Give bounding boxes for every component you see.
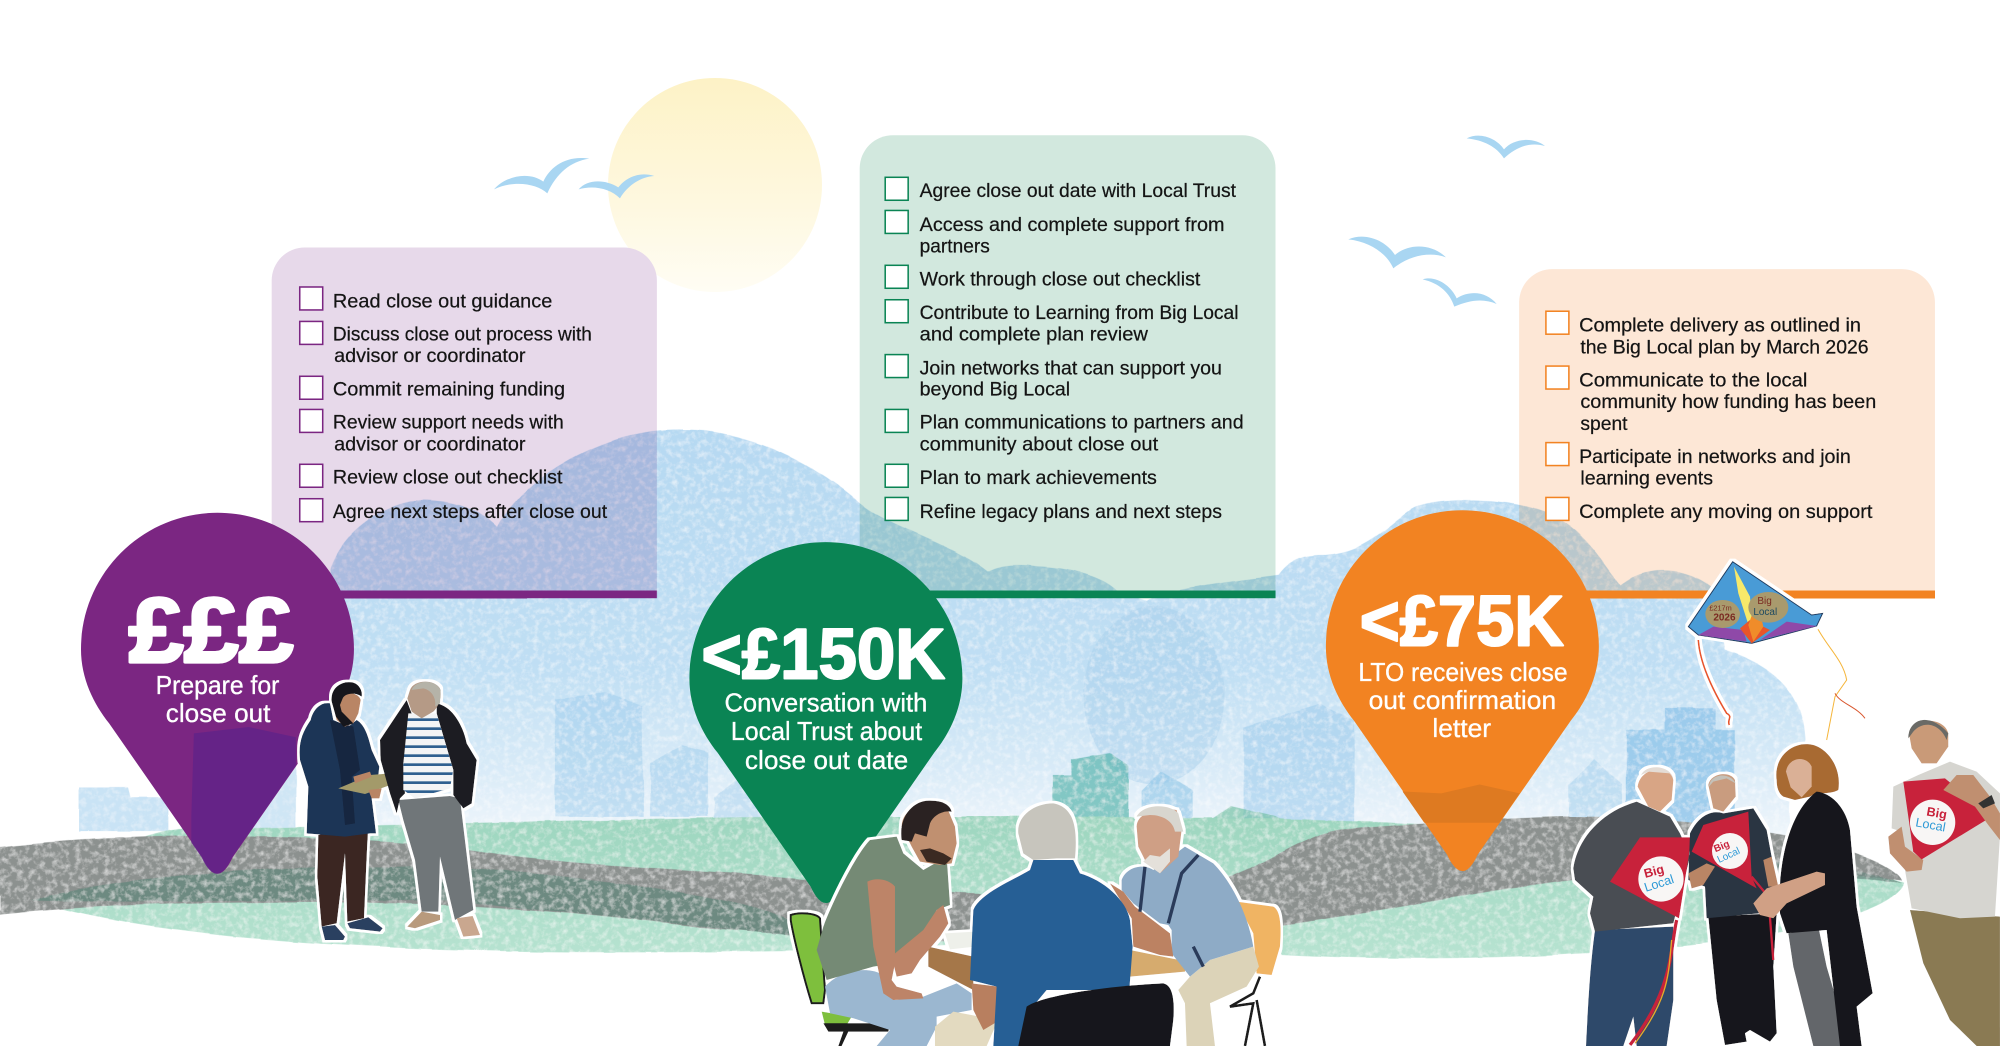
man in blue polo from behind — [935, 803, 1174, 1046]
green hill — [32, 816, 1904, 958]
panel bars — [272, 591, 1935, 598]
checklist text: orange panel — [1579, 315, 1876, 523]
checklist text: green panel: Join networks that can support you — [920, 357, 1222, 379]
man in striped shirt — [380, 682, 480, 937]
birds: left pair — [494, 158, 654, 198]
man in checked blue shirt — [1110, 806, 1281, 1046]
pin label: LTO: out confirmation — [1369, 687, 1556, 715]
kite body and left tail: £217m — [1709, 604, 1732, 613]
man in white polo with kite — [1888, 720, 2000, 1046]
man in green t-shirt — [817, 801, 972, 1046]
woman in black cardigan — [1753, 744, 1873, 1046]
checklist text: orange panel: Complete delivery as outlined in — [1579, 315, 1861, 337]
skyline shade on orange pin — [1402, 784, 1520, 823]
people: two men with clipboard — [300, 682, 480, 940]
kite tail right — [1817, 627, 1865, 740]
pin: prepare for close out — [81, 513, 354, 880]
green chair — [791, 913, 890, 1046]
checklist text: green panel: Contribute to Learning from Big Local — [920, 302, 1239, 324]
older man with kite: Big — [1712, 839, 1731, 855]
panel backgrounds — [272, 135, 1935, 598]
pin label: conversation: close out date — [745, 747, 908, 775]
pin label: conversation: Conversation with — [724, 690, 927, 718]
checklist text: purple panel: Review support needs with — [333, 412, 564, 434]
man in grey sweater with kite: Big — [1642, 862, 1666, 881]
kite body and left tail: 2026 — [1713, 613, 1736, 624]
checklist text: green panel: beyond Big Local — [920, 378, 1070, 400]
older man with kite — [1688, 774, 1778, 1045]
panel: LTO checklist — [1546, 311, 1876, 523]
checklist text: purple panel: Review close out checklist — [333, 466, 563, 488]
checklist text: green panel: Work through close out checklist — [920, 269, 1201, 291]
checkboxes: purple — [300, 287, 323, 522]
pin figure: 75K: <£75K — [1360, 581, 1564, 661]
checklist text: green panel: Plan to mark achievements — [920, 467, 1157, 489]
checklist text: orange panel: Communicate to the local — [1579, 369, 1807, 391]
panel: prepare for close out checklist — [300, 287, 608, 523]
checklist text: purple panel: Discuss close out process with — [333, 324, 592, 346]
checklist text: green panel: Access and complete support from — [920, 214, 1224, 236]
checklist text: purple panel — [333, 290, 608, 523]
checklist text: orange panel: the Big Local plan by March 2026 — [1580, 336, 1869, 358]
pin label: LTO — [1358, 659, 1568, 743]
skyline shade on purple pin — [191, 727, 296, 880]
panel: conversation checklist — [885, 177, 1244, 523]
kite flying — [1688, 562, 1865, 740]
checklist text: green panel: and complete plan review — [920, 324, 1149, 346]
kite body and left tail — [1688, 562, 1823, 725]
checklist text: green panel: community about close out — [920, 433, 1159, 455]
grey road — [0, 816, 1902, 942]
pin figure: pounds: £££ — [129, 580, 293, 682]
pin figure: 150K: <£150K — [702, 615, 945, 695]
pin: conversation with Local Trust — [689, 542, 962, 903]
dome — [1084, 606, 1224, 784]
man in grey sweater with kite — [1573, 767, 1692, 1046]
pin label: LTO: letter — [1432, 715, 1492, 743]
pin label: prepare: close out — [166, 700, 270, 728]
pin label: conversation — [724, 690, 927, 775]
birds: right trio — [1348, 136, 1545, 307]
people: four people with kites — [1573, 720, 2000, 1046]
kite body and left tail: Local — [1753, 607, 1777, 618]
pin label: prepare: Prepare for — [156, 672, 280, 700]
pin label: LTO: LTO receives close — [1358, 659, 1568, 687]
landscape: clouds, skyline and hills — [0, 430, 1904, 958]
checklist text: orange panel: learning events — [1580, 468, 1713, 490]
clouds — [330, 430, 1805, 835]
hill and road overlap — [32, 866, 816, 937]
sun — [608, 78, 822, 292]
older man with kite: Local — [1716, 846, 1742, 866]
checkboxes: green — [885, 177, 908, 520]
checklist text: orange panel: Participate in networks and join — [1579, 446, 1851, 468]
pin label: prepare — [156, 672, 280, 728]
skyline — [79, 693, 1735, 881]
checklist text: purple panel: Agree next steps after close out — [333, 501, 608, 523]
pin label: conversation: Local Trust about — [731, 718, 922, 746]
checklist text: orange panel: community how funding has been — [1580, 391, 1876, 413]
man in white polo with kite: Big — [1926, 805, 1948, 822]
man with clipboard — [300, 682, 400, 940]
checklist text: green panel: Plan communications to partners and — [920, 412, 1244, 434]
checklist text: orange panel: spent — [1580, 413, 1628, 435]
people: three people at a table — [791, 801, 1281, 1046]
man in grey sweater with kite: Local — [1643, 872, 1676, 895]
table — [928, 932, 1187, 990]
checklist text: purple panel: Commit remaining funding — [333, 378, 565, 400]
checklist text: green panel — [920, 180, 1244, 523]
checklist text: green panel: Agree close out date with Local Trust — [920, 180, 1236, 202]
kite body and left tail: Big — [1757, 596, 1772, 607]
checklist text: orange panel: Complete any moving on support — [1579, 501, 1873, 523]
checklist text: green panel: partners — [920, 236, 990, 258]
pin: LTO receives letter — [1326, 510, 1599, 871]
checklist text: green panel: Refine legacy plans and next steps — [920, 501, 1222, 523]
checklist text: purple panel: Read close out guidance — [333, 290, 552, 312]
man in white polo with kite: Local — [1914, 815, 1947, 835]
checkboxes: orange — [1546, 311, 1569, 520]
checklist text: purple panel: advisor or coordinator — [334, 433, 526, 455]
checklist text: purple panel: advisor or coordinator — [334, 345, 526, 367]
